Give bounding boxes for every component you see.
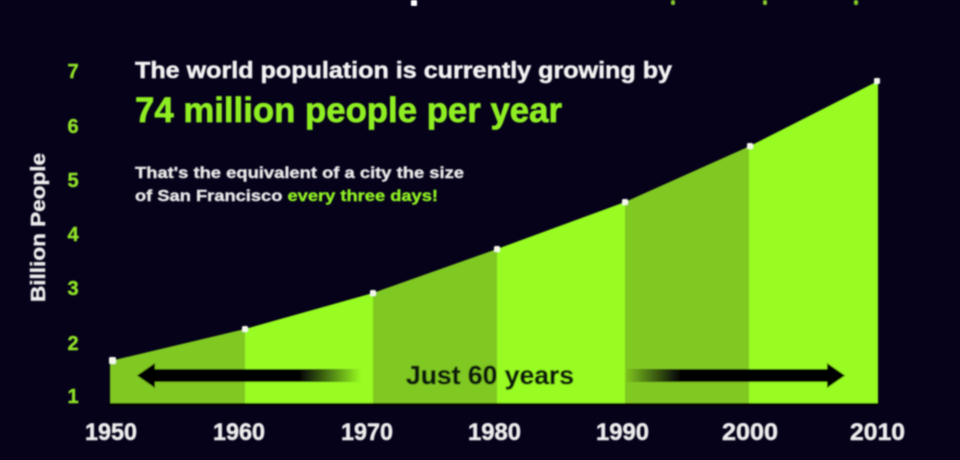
area chart [109, 60, 880, 410]
x axis labels: 1970 [341, 419, 393, 446]
right arrow [625, 363, 845, 388]
data points [109, 78, 880, 364]
x axis labels: 2000 [722, 419, 778, 446]
x axis labels: 2010 [850, 419, 905, 446]
y axis title: Billion People [28, 153, 50, 302]
arrow label: Just 60 years [406, 360, 574, 390]
heading line: The world population is currently growing by [135, 57, 672, 83]
heading text block [135, 57, 672, 205]
y axis labels: 4 [67, 224, 79, 246]
x axis labels: 1980 [468, 419, 521, 446]
x axis labels: 1960 [213, 419, 265, 446]
decade bands [110, 60, 878, 410]
y axis labels [67, 61, 79, 408]
y axis labels: 3 [67, 278, 79, 300]
x axis labels: 1990 [596, 419, 649, 446]
y axis labels: 2 [67, 333, 79, 355]
y axis labels: 6 [67, 116, 79, 138]
headline statistic: 74 million people per year [135, 91, 562, 130]
y axis labels: 1 [67, 386, 79, 408]
baseline shadow [110, 403, 878, 406]
x axis labels [85, 419, 905, 446]
y axis labels: 5 [67, 170, 79, 192]
cropped title remnants [411, 0, 858, 6]
comparison line two: of San Francisco every three days! [135, 188, 438, 205]
x axis labels: 1950 [85, 419, 137, 446]
left arrow [137, 363, 361, 388]
y axis labels: 7 [67, 61, 79, 83]
comparison line one: That's the equivalent of a city the size [135, 165, 464, 182]
